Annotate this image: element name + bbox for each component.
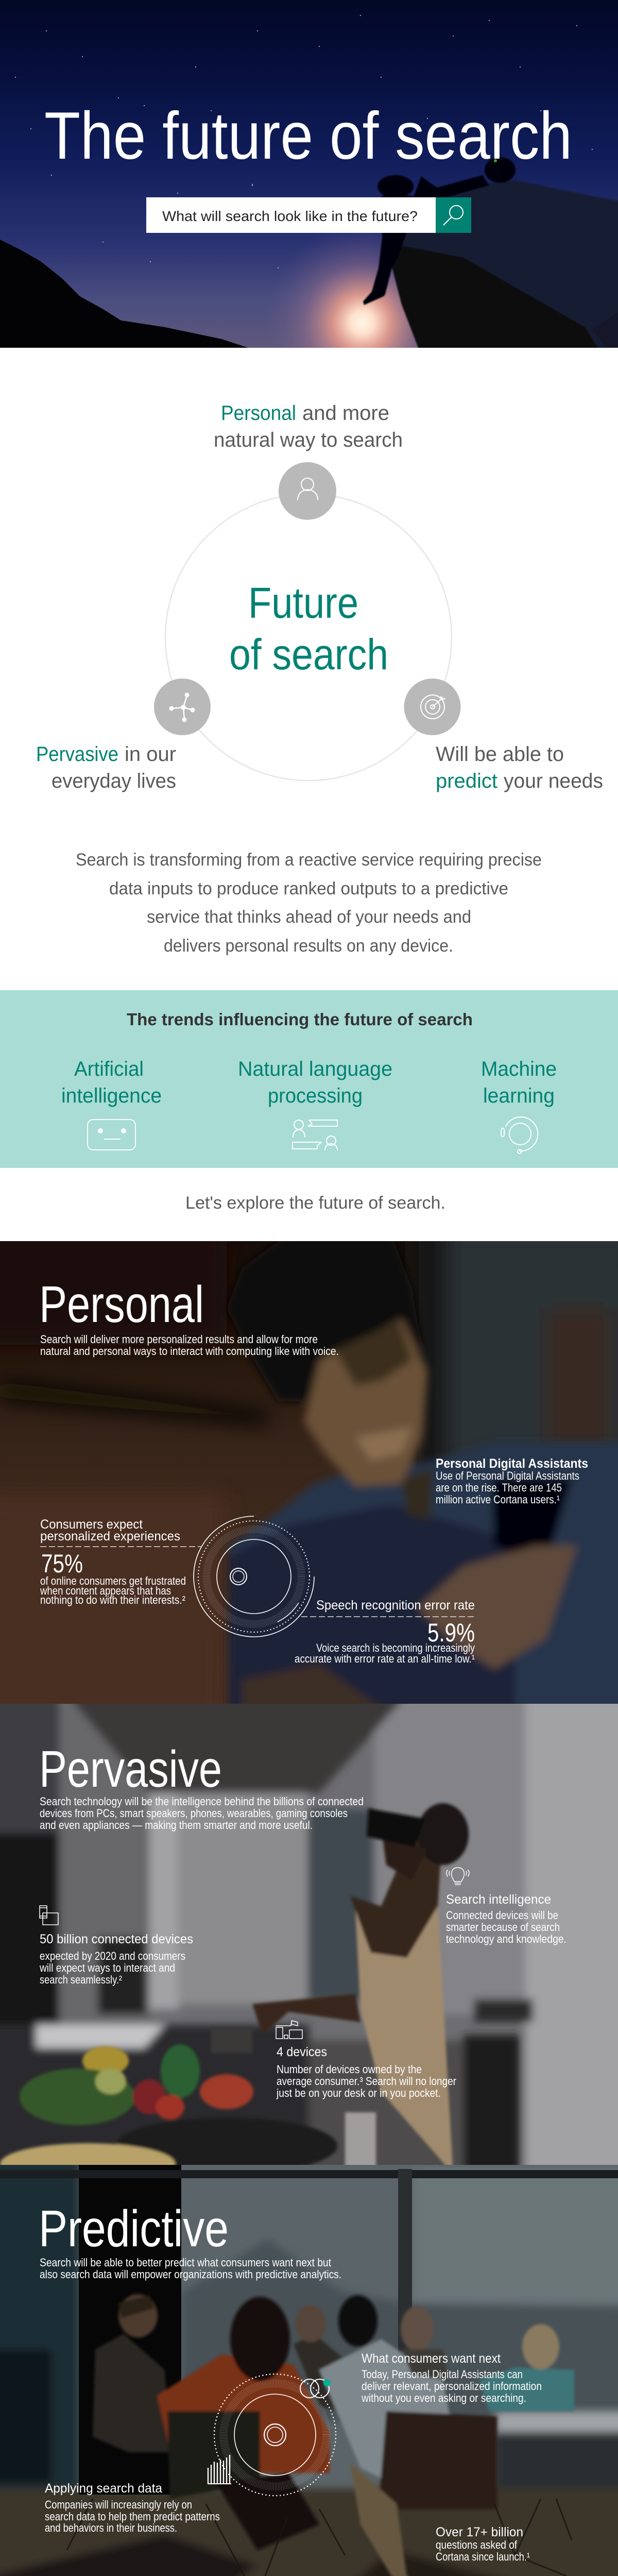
description: natural and personal ways to interact with computing like with voice. (40, 1345, 339, 1358)
callout: search intelligence: technology and knowledge. (446, 1933, 566, 1945)
label: predict: predict (436, 770, 497, 792)
trend: natural language processing: Natural language (238, 1058, 392, 1080)
radial graphic (214, 2374, 336, 2496)
trend: machine learning: learning (483, 1084, 555, 1107)
callout: 75 percent (40, 1517, 201, 1606)
label: pervasive (36, 743, 176, 792)
callout: 4 devices: Number of devices owned by the (277, 2063, 422, 2076)
label: predict: Will be able to (436, 743, 564, 766)
callout: 75 percent: when content appears that has (40, 1584, 171, 1597)
callout: applying search data: search data to help them predict patterns (45, 2510, 220, 2523)
description: Search will deliver more personalized results and allow for more (40, 1333, 318, 1346)
center heading (229, 579, 388, 679)
callout: 5.9 percent: Voice search is becoming increasingly (316, 1641, 475, 1654)
callout: 50 billion: expected by 2020 and consumers (40, 1950, 185, 1962)
trend: artificial intelligence: intelligence (61, 1084, 162, 1107)
callout: search intelligence (446, 1892, 566, 1945)
heading: Personal (39, 1276, 204, 1333)
callout: 75 percent: 75% (41, 1549, 83, 1578)
label: personal (214, 402, 403, 451)
callout: personal digital assistants (436, 1456, 588, 1506)
callout: 4 devices: just be on your desk or in you pocket. (276, 2087, 441, 2099)
callout: applying search data: Applying search data (45, 2481, 162, 2496)
label: predict (436, 743, 603, 792)
description: and even appliances — making them smarter and more useful. (40, 1819, 313, 1832)
callout: applying search data (45, 2481, 220, 2534)
trend: machine learning: Machine (481, 1058, 557, 1080)
trend: natural language processing (238, 1058, 392, 1150)
callout: 4 devices (276, 2045, 456, 2099)
trend: machine learning (481, 1058, 557, 1154)
callout: personal digital assistants: Use of Personal Digital Assistants (436, 1469, 579, 1482)
icon: network (154, 679, 211, 735)
panel: future of search diagram (36, 402, 603, 792)
callout: 17 billion: Over 17+ billion (436, 2525, 523, 2539)
trend: artificial intelligence (61, 1058, 162, 1150)
intro paragraph: service that thinks ahead of your needs and (147, 907, 471, 927)
panel: hero (0, 0, 618, 420)
ring (165, 494, 452, 781)
callout: personal digital assistants: million active Cortana users.¹ (436, 1493, 560, 1506)
label: pervasive: everyday lives (52, 770, 176, 792)
search box (146, 197, 471, 233)
trend: artificial intelligence: Artificial (74, 1058, 144, 1080)
callout: applying search data: Companies will increasingly rely on (45, 2498, 192, 2511)
callout: 75 percent: Consumers expect (40, 1517, 143, 1532)
description: also search data will empower organizations with predictive analytics. (40, 2268, 341, 2281)
description: Search will be able to better predict what consumers want next but (40, 2256, 331, 2269)
radial graphic (194, 1516, 314, 1637)
callout: 75 percent: of online consumers get frustrated (40, 1574, 186, 1587)
intro paragraph: delivers personal results on any device. (164, 936, 453, 956)
callout: what consumers want next: Today, Personal Digital Assistants can (362, 2368, 523, 2381)
callout: 17 billion: Cortana since launch.¹ (436, 2550, 530, 2563)
search box: What will search look like in the future? (162, 208, 418, 224)
icon: light bulb (447, 1868, 469, 1885)
callout: 4 devices: average consumer.³ Search will no longer (277, 2075, 456, 2088)
panel: personal (0, 1226, 618, 1721)
intro paragraph: Search is transforming from a reactive service requiring precise (76, 850, 542, 870)
callout: 5.9 percent (295, 1598, 475, 1665)
callout: search intelligence: Connected devices will be (446, 1909, 558, 1922)
callout: what consumers want next: deliver relevant, personalized information (362, 2380, 542, 2393)
callout: what consumers want next: What consumers want next (362, 2351, 501, 2366)
intro paragraph (76, 850, 542, 956)
callout: search intelligence: Search intelligence (446, 1892, 551, 1907)
description (40, 2256, 341, 2281)
description (40, 1333, 339, 1358)
label: pervasive: Pervasive (36, 743, 118, 766)
intro paragraph: data inputs to produce ranked outputs to a predictive (109, 879, 508, 899)
panel: predictive (0, 2159, 618, 2576)
icon: devices (40, 1906, 58, 1925)
callout: 50 billion: search seamlessly.² (40, 1973, 122, 1986)
callout: personal digital assistants: are on the rise. There are 145 (436, 1481, 562, 1494)
callout: search intelligence: smarter because of search (446, 1921, 560, 1934)
callout: 17 billion (436, 2525, 530, 2563)
callout: 5.9 percent: Speech recognition error rate (316, 1598, 475, 1613)
callout: what consumers want next (361, 2351, 542, 2404)
label: predict: your needs (504, 770, 603, 792)
label: personal: Personal (221, 402, 296, 425)
callout: 50 billion: will expect ways to interact and (39, 1961, 175, 1974)
description (40, 1795, 364, 1832)
heading: Predictive (39, 2200, 229, 2258)
trend: natural language processing: processing (268, 1084, 363, 1107)
callout: 5.9 percent: accurate with error rate at an all-time low.¹ (295, 1652, 475, 1665)
callout: applying search data: and behaviors in their business. (45, 2521, 177, 2534)
label: personal: natural way to search (214, 429, 403, 451)
center heading: of search (229, 630, 388, 679)
label: personal: and more (302, 402, 389, 425)
callout: what consumers want next: without you even asking or searching. (361, 2392, 526, 2404)
center heading: Future (248, 579, 358, 627)
callout: 5.9 percent: 5.9% (427, 1618, 475, 1647)
icon: target (404, 679, 460, 735)
icon: person (279, 462, 336, 520)
callout: 50 billion: 50 billion connected devices (40, 1932, 193, 1946)
callout: 75 percent: personalized experiences (40, 1529, 180, 1544)
label: pervasive: in our (125, 743, 176, 766)
explore line: Let's explore the future of search. (185, 1193, 445, 1213)
callout: personal digital assistants: Personal Digital Assistants (436, 1456, 588, 1471)
heading: The trends influencing the future of search (127, 1010, 473, 1029)
callout: 75 percent: nothing to do with their interests.² (40, 1594, 185, 1606)
icon: bar chart (208, 2455, 231, 2484)
callout: 4 devices: 4 devices (277, 2045, 327, 2059)
callout: 50 billion (39, 1932, 193, 1986)
panel: pervasive (0, 1695, 618, 2184)
description: devices from PCs, smart speakers, phones, wearables, gaming consoles (40, 1807, 348, 1820)
icon: four devices (276, 2021, 302, 2039)
heading: Pervasive (39, 1740, 222, 1798)
panel: trends (0, 990, 618, 1168)
description: Search technology will be the intelligence behind the billions of connected (40, 1795, 364, 1808)
callout: 17 billion: questions asked of (436, 2538, 518, 2551)
